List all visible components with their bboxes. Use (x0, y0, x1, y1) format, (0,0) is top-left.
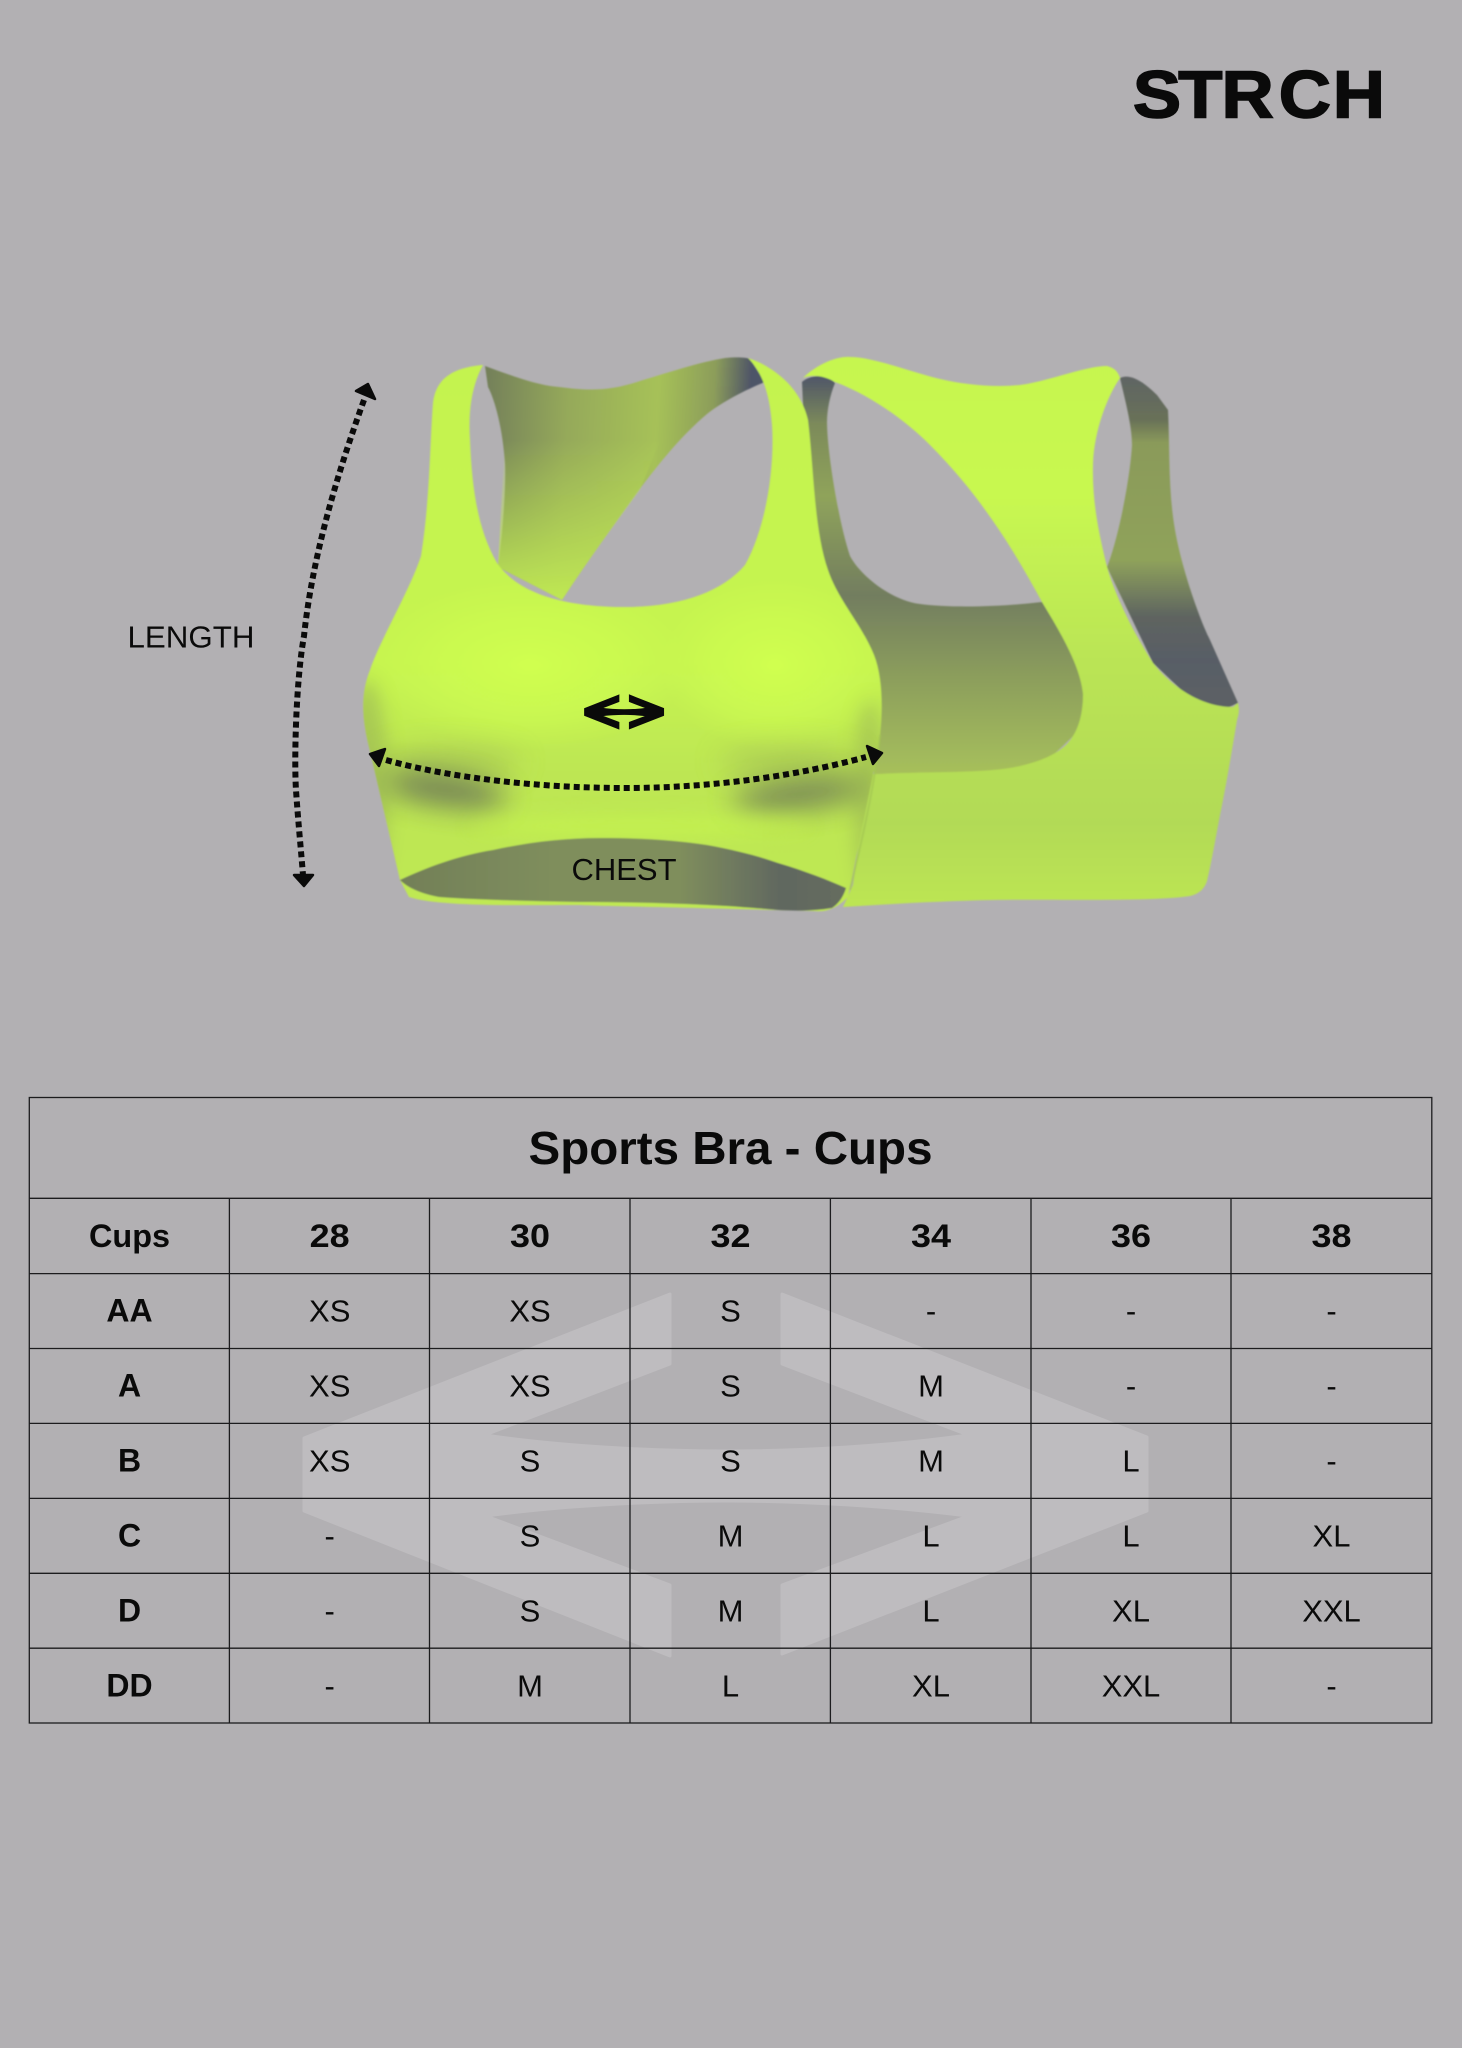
row B: S (720, 1444, 741, 1478)
logo: STRCH wordmark: STRCH (1133, 57, 1385, 132)
row DD: - (325, 1668, 335, 1704)
row C: S (520, 1518, 540, 1554)
row DD: DD (106, 1668, 153, 1704)
row C: L (922, 1518, 940, 1554)
row AA: AA (106, 1292, 153, 1328)
row A: XS (509, 1368, 551, 1404)
row DD: XXL (1102, 1668, 1160, 1704)
row AA: S (720, 1294, 741, 1328)
header row: Cups (89, 1218, 170, 1254)
row AA (106, 1292, 1337, 1328)
row DD: M (517, 1668, 543, 1704)
row DD: L (722, 1668, 739, 1704)
row D: M (718, 1594, 743, 1628)
row DD: XL (912, 1668, 950, 1704)
row AA: - (1326, 1294, 1337, 1328)
row AA: - (926, 1294, 936, 1328)
row AA: - (1126, 1294, 1136, 1328)
size table (29, 1098, 1432, 1723)
row A (118, 1368, 1337, 1404)
row B: - (1326, 1444, 1337, 1478)
row A: - (1326, 1368, 1337, 1404)
front view body (363, 358, 882, 911)
table grid (29, 1098, 1432, 1723)
back view outer fabric (803, 357, 1239, 907)
label: chest: CHEST (572, 852, 677, 887)
row C: C (118, 1518, 141, 1554)
row A: M (918, 1368, 944, 1404)
bra illustration (344, 357, 1239, 911)
row D (118, 1592, 1361, 1628)
row A: A (118, 1368, 141, 1404)
row C (118, 1518, 1350, 1554)
front hem opening (400, 838, 846, 911)
header row (89, 1218, 1352, 1254)
row C: L (1122, 1518, 1140, 1554)
row B: S (520, 1444, 540, 1478)
row A: XS (309, 1368, 350, 1404)
back strap seen through the neckline (485, 357, 765, 600)
label: length: LENGTH (128, 620, 254, 654)
row C: M (718, 1518, 743, 1554)
row B: B (118, 1442, 141, 1478)
arrow: length measure (294, 384, 375, 886)
front view shading (344, 580, 890, 900)
row C: XL (1313, 1518, 1350, 1554)
row D: XXL (1302, 1594, 1361, 1628)
row A: S (720, 1368, 741, 1404)
row AA: XS (309, 1294, 350, 1328)
row D: S (520, 1594, 540, 1628)
row AA: XS (509, 1294, 551, 1328)
far inner strap of back view (1107, 377, 1238, 708)
emblem on the bra (585, 695, 664, 729)
header row: 38 (1312, 1218, 1352, 1254)
row DD (106, 1668, 1337, 1704)
row B: L (1122, 1444, 1140, 1478)
row B: M (918, 1444, 944, 1478)
row D: D (118, 1592, 141, 1628)
row D: L (922, 1594, 940, 1628)
arrow: chest measure (370, 746, 882, 788)
row B: XS (309, 1444, 350, 1478)
watermark: STRCH arrow emblem (304, 1294, 1147, 1656)
row C: - (325, 1518, 335, 1554)
header row: 34 (911, 1218, 951, 1254)
header row: 28 (310, 1218, 350, 1254)
interior of back view (802, 376, 1090, 778)
infographic canvas (28, 70, 1432, 1724)
table title: Sports Bra - Cups (528, 1122, 932, 1174)
header row: 32 (710, 1218, 750, 1254)
row D: - (325, 1594, 335, 1628)
row DD: - (1326, 1668, 1337, 1704)
header row: 30 (510, 1218, 550, 1254)
row D: XL (1112, 1594, 1150, 1628)
header row: 36 (1111, 1218, 1151, 1254)
front side seam (850, 735, 880, 890)
row A: - (1126, 1368, 1136, 1404)
row B (118, 1442, 1337, 1478)
